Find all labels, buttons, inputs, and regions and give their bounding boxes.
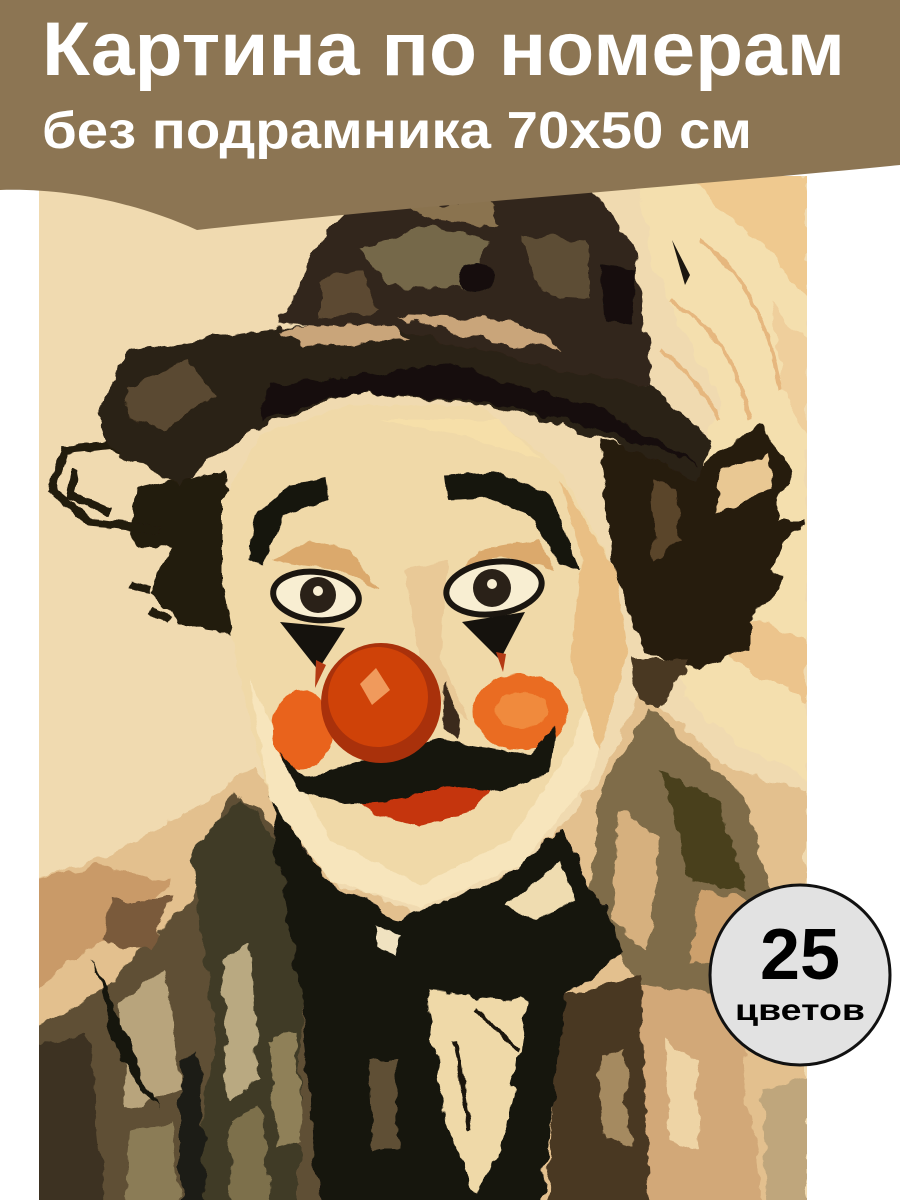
painting background <box>39 176 807 1200</box>
shirt collar highlights <box>375 862 575 955</box>
banner shape <box>0 0 900 230</box>
hair <box>130 425 805 710</box>
badge number: 25 <box>760 915 840 995</box>
badge circle <box>710 885 890 1065</box>
panel: painting <box>30 176 810 1200</box>
face <box>222 405 628 908</box>
mustache <box>278 725 556 804</box>
coat <box>30 690 810 1200</box>
clown nose <box>321 643 441 763</box>
badge: 25 colours <box>710 885 890 1065</box>
hat <box>95 185 712 485</box>
lips <box>361 786 490 826</box>
cheeks <box>272 674 567 770</box>
eyebrows <box>248 472 580 570</box>
shirt fold <box>455 1010 520 1130</box>
left hair wisps <box>52 445 170 620</box>
subtitle: без подрамника 70х50 см <box>42 102 752 160</box>
title: Картина по номерам <box>42 7 845 92</box>
scarf and shirt <box>270 795 625 1200</box>
hat spots <box>458 263 635 325</box>
eyes <box>271 556 545 688</box>
badge label: цветов <box>735 994 865 1027</box>
banner <box>0 0 900 230</box>
